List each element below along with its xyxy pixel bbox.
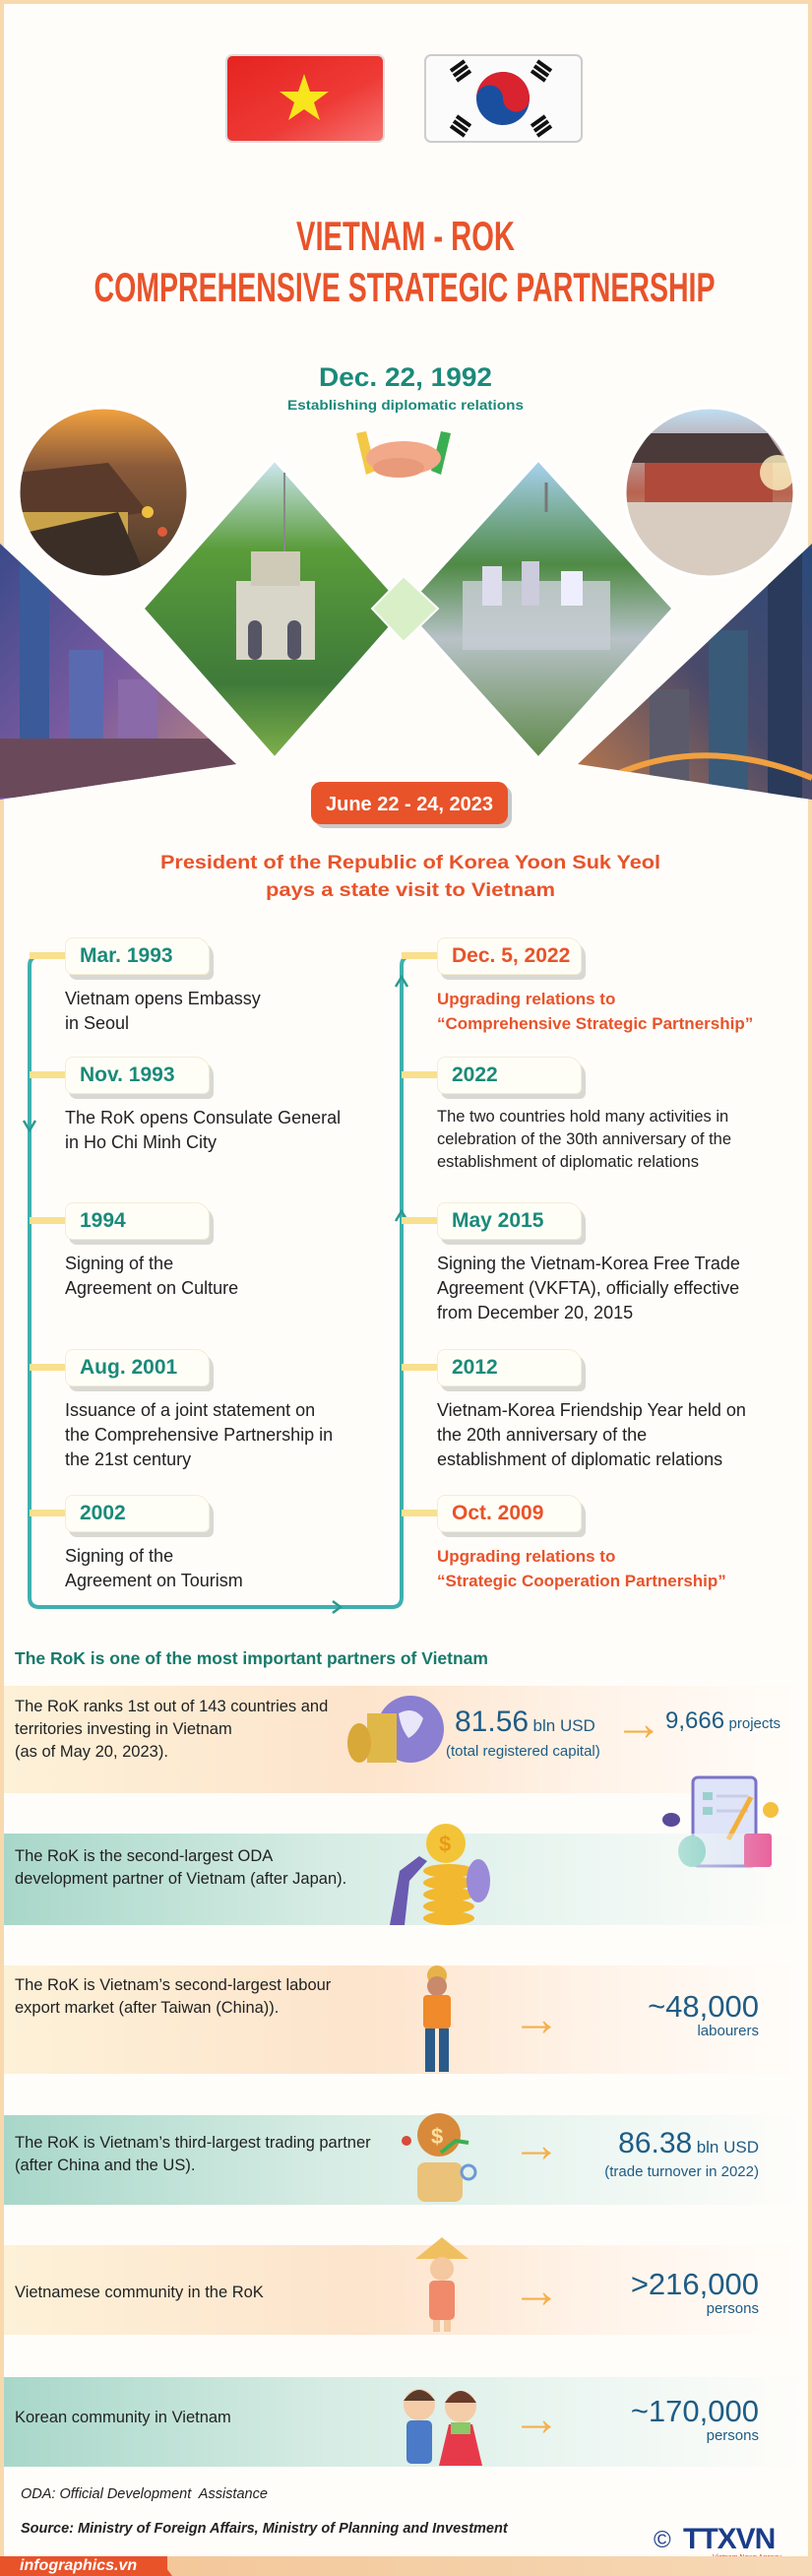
- flag: Korea: [425, 55, 582, 142]
- item: Mar. 1993: Vietnam opens Embassy: [65, 989, 261, 1008]
- item: Nov. 1993: The RoK opens Consulate General: [65, 1108, 341, 1127]
- item: May 2015: Agreement (VKFTA), officially effective: [437, 1278, 739, 1298]
- item: 2022: 2022: [452, 1063, 498, 1086]
- photo: Hoi An circle: [20, 410, 187, 575]
- item: Dec. 5, 2022: Upgrading relations to: [437, 990, 615, 1008]
- row: ODA: [4, 1834, 808, 1925]
- row: trade: (after China and the US).: [15, 2157, 195, 2174]
- row: trade: The RoK is Vietnam’s third-largest trading partner: [15, 2134, 371, 2152]
- row: FDI: 81.56 bln USD: [455, 1706, 595, 1738]
- item: Dec. 5, 2022: Dec. 5, 2022: [452, 944, 570, 967]
- item: Aug. 2001: [65, 1349, 333, 1469]
- icon: person with coins: [390, 1824, 490, 1925]
- icon: handshake: [356, 431, 451, 478]
- row: FDI: The RoK ranks 1st out of 143 countries and: [15, 1698, 328, 1715]
- item: 2022: establishment of diplomatic relations: [437, 1153, 699, 1171]
- row: trade: (trade turnover in 2022): [604, 2163, 759, 2180]
- row: Korean community: persons: [707, 2427, 759, 2444]
- row: Vietnamese community: >216,000: [631, 2267, 759, 2301]
- row: Vietnamese community: [4, 2245, 808, 2335]
- timeline: [23, 937, 753, 1614]
- arrow: →: [512, 2391, 561, 2446]
- item: Nov. 1993: in Ho Chi Minh City: [65, 1132, 217, 1152]
- title: VIETNAM - ROK: [296, 213, 515, 259]
- item: Mar. 1993: [65, 937, 261, 1033]
- item: 2012: Vietnam-Korea Friendship Year held on: [437, 1400, 746, 1420]
- item: 2002: Signing of the: [65, 1546, 173, 1566]
- item: Mar. 1993: in Seoul: [65, 1013, 129, 1033]
- photo: Seoul night triangle: [578, 544, 812, 807]
- icon: Vietnamese girl: [415, 2237, 468, 2332]
- item: 1994: Agreement on Culture: [65, 1278, 238, 1298]
- row: Vietnamese community: persons: [707, 2300, 759, 2317]
- icon: coin chart: [402, 2113, 476, 2202]
- item: Nov. 1993: [65, 1057, 341, 1152]
- arrow: →: [614, 1696, 663, 1751]
- row: labour: ~48,000: [648, 1989, 759, 2024]
- item: 1994: Signing of the: [65, 1254, 173, 1273]
- icon: globe and coins: [347, 1696, 444, 1763]
- row: FDI: [4, 1686, 808, 1793]
- icon: person with coins: $: [439, 1832, 451, 1856]
- date: Dec. 22, 1992: Establishing diplomatic relations: [287, 397, 524, 413]
- item: 2002: [65, 1495, 243, 1590]
- row: ODA: development partner of Vietnam (after Japan).: [15, 1870, 346, 1888]
- item: May 2015: from December 20, 2015: [437, 1303, 633, 1322]
- arrow: →: [512, 1991, 561, 2046]
- small center diamond: [372, 576, 438, 642]
- row: Vietnamese community: Vietnamese community in the RoK: [15, 2284, 264, 2301]
- photo: Seoul city diamond: [404, 460, 673, 758]
- arrow: →: [512, 2263, 561, 2318]
- row: labour: The RoK is Vietnam’s second-largest labour: [15, 1976, 331, 1994]
- row: Korean community: ~170,000: [631, 2394, 759, 2428]
- photo: Ho Chi Minh City triangle: [0, 544, 236, 807]
- timeline path line: [23, 958, 408, 1614]
- footer: infographics.vn: infographics.vn: [20, 2557, 137, 2574]
- item: 2012: 2012: [452, 1356, 498, 1379]
- item: 2002: 2002: [80, 1502, 126, 1524]
- row: FDI: 9,666 projects: [665, 1707, 781, 1734]
- date pill: June 22 - 24, 2023: June 22 - 24, 2023: [326, 794, 493, 815]
- footer: infographics.vn: [0, 2556, 808, 2576]
- icon: coin chart: $: [431, 2124, 443, 2149]
- row: labour: [4, 1965, 808, 2074]
- item: Nov. 1993: Nov. 1993: [80, 1063, 175, 1086]
- row: Korean community: [4, 2377, 808, 2467]
- headline: state visit: pays a state visit to Vietnam: [266, 880, 555, 901]
- item: 2022: [437, 1057, 731, 1171]
- item: 2012: [437, 1349, 746, 1469]
- item: Oct. 2009: “Strategic Cooperation Partnership”: [437, 1572, 726, 1590]
- section heading: The RoK is one of the most important partners of Vietnam: [15, 1648, 488, 1668]
- logo: TTXVN: ©: [654, 2527, 671, 2553]
- item: 2022: celebration of the 30th anniversary of the: [437, 1130, 731, 1148]
- item: Dec. 5, 2022: “Comprehensive Strategic Partnership”: [437, 1014, 753, 1033]
- flag: Vietnam: [226, 55, 384, 142]
- icon: Korean children: [404, 2389, 482, 2466]
- logo: TTXVN: [654, 2523, 781, 2561]
- row: labour: export market (after Taiwan (China)).: [15, 1999, 279, 2017]
- item: 2022: The two countries hold many activities in: [437, 1108, 728, 1126]
- item: 1994: [65, 1202, 238, 1298]
- row: trade: 86.38 bln USD: [618, 2127, 759, 2159]
- item: Oct. 2009: Upgrading relations to: [437, 1547, 615, 1566]
- logo: TTXVN: Vietnam News Agency: [713, 2554, 781, 2561]
- item: May 2015: Signing the Vietnam-Korea Free Trade: [437, 1254, 740, 1273]
- icon: worker: [423, 1965, 451, 2072]
- date: Dec. 22, 1992: [287, 362, 524, 413]
- logo: TTXVN: TTXVN: [683, 2523, 775, 2555]
- item: Dec. 5, 2022: [437, 937, 753, 1033]
- arrow: →: [512, 2117, 561, 2172]
- header illustration: [0, 54, 812, 901]
- source: Source: Ministry of Foreign Affairs, Ministry of Planning and Investment: [21, 2521, 508, 2537]
- row: trade: [4, 2115, 808, 2205]
- row: FDI: (as of May 20, 2023).: [15, 1743, 168, 1761]
- date pill: June 22 - 24, 2023: [311, 782, 512, 828]
- item: May 2015: May 2015: [452, 1209, 543, 1232]
- headline: state visit: President of the Republic of Korea Yoon Suk Yeol: [160, 853, 660, 873]
- photo: Gyeongbok palace circle: [625, 408, 802, 581]
- headline: state visit: [160, 853, 660, 901]
- date: Dec. 22, 1992: Dec. 22, 1992: [319, 362, 492, 392]
- row: FDI: (total registered capital): [446, 1743, 600, 1760]
- item: 2012: the 20th anniversary of the: [437, 1425, 647, 1445]
- item: 1994: 1994: [80, 1209, 126, 1232]
- row: Korean community: Korean community in Vietnam: [15, 2409, 231, 2426]
- item: Aug. 2001: Aug. 2001: [80, 1356, 177, 1379]
- item: May 2015: [437, 1202, 740, 1322]
- item: Oct. 2009: Oct. 2009: [452, 1502, 543, 1524]
- item: 2002: Agreement on Tourism: [65, 1571, 243, 1590]
- item: Aug. 2001: the Comprehensive Partnership in: [65, 1425, 333, 1445]
- item: Oct. 2009: [437, 1495, 726, 1590]
- item: Mar. 1993: Mar. 1993: [80, 944, 173, 967]
- title: [94, 213, 715, 310]
- row: FDI: territories investing in Vietnam: [15, 1720, 232, 1738]
- photo: Hanoi turtle tower diamond: [143, 460, 406, 758]
- row: labour: labourers: [697, 2023, 759, 2039]
- row: ODA: The RoK is the second-largest ODA: [15, 1847, 273, 1865]
- footnote: ODA: ODA: Official Development Assistance: [21, 2486, 268, 2502]
- item: Aug. 2001: Issuance of a joint statement on: [65, 1400, 315, 1420]
- item: 2012: establishment of diplomatic relations: [437, 1449, 722, 1469]
- icon: clipboard: [662, 1776, 779, 1867]
- item: Aug. 2001: the 21st century: [65, 1449, 191, 1469]
